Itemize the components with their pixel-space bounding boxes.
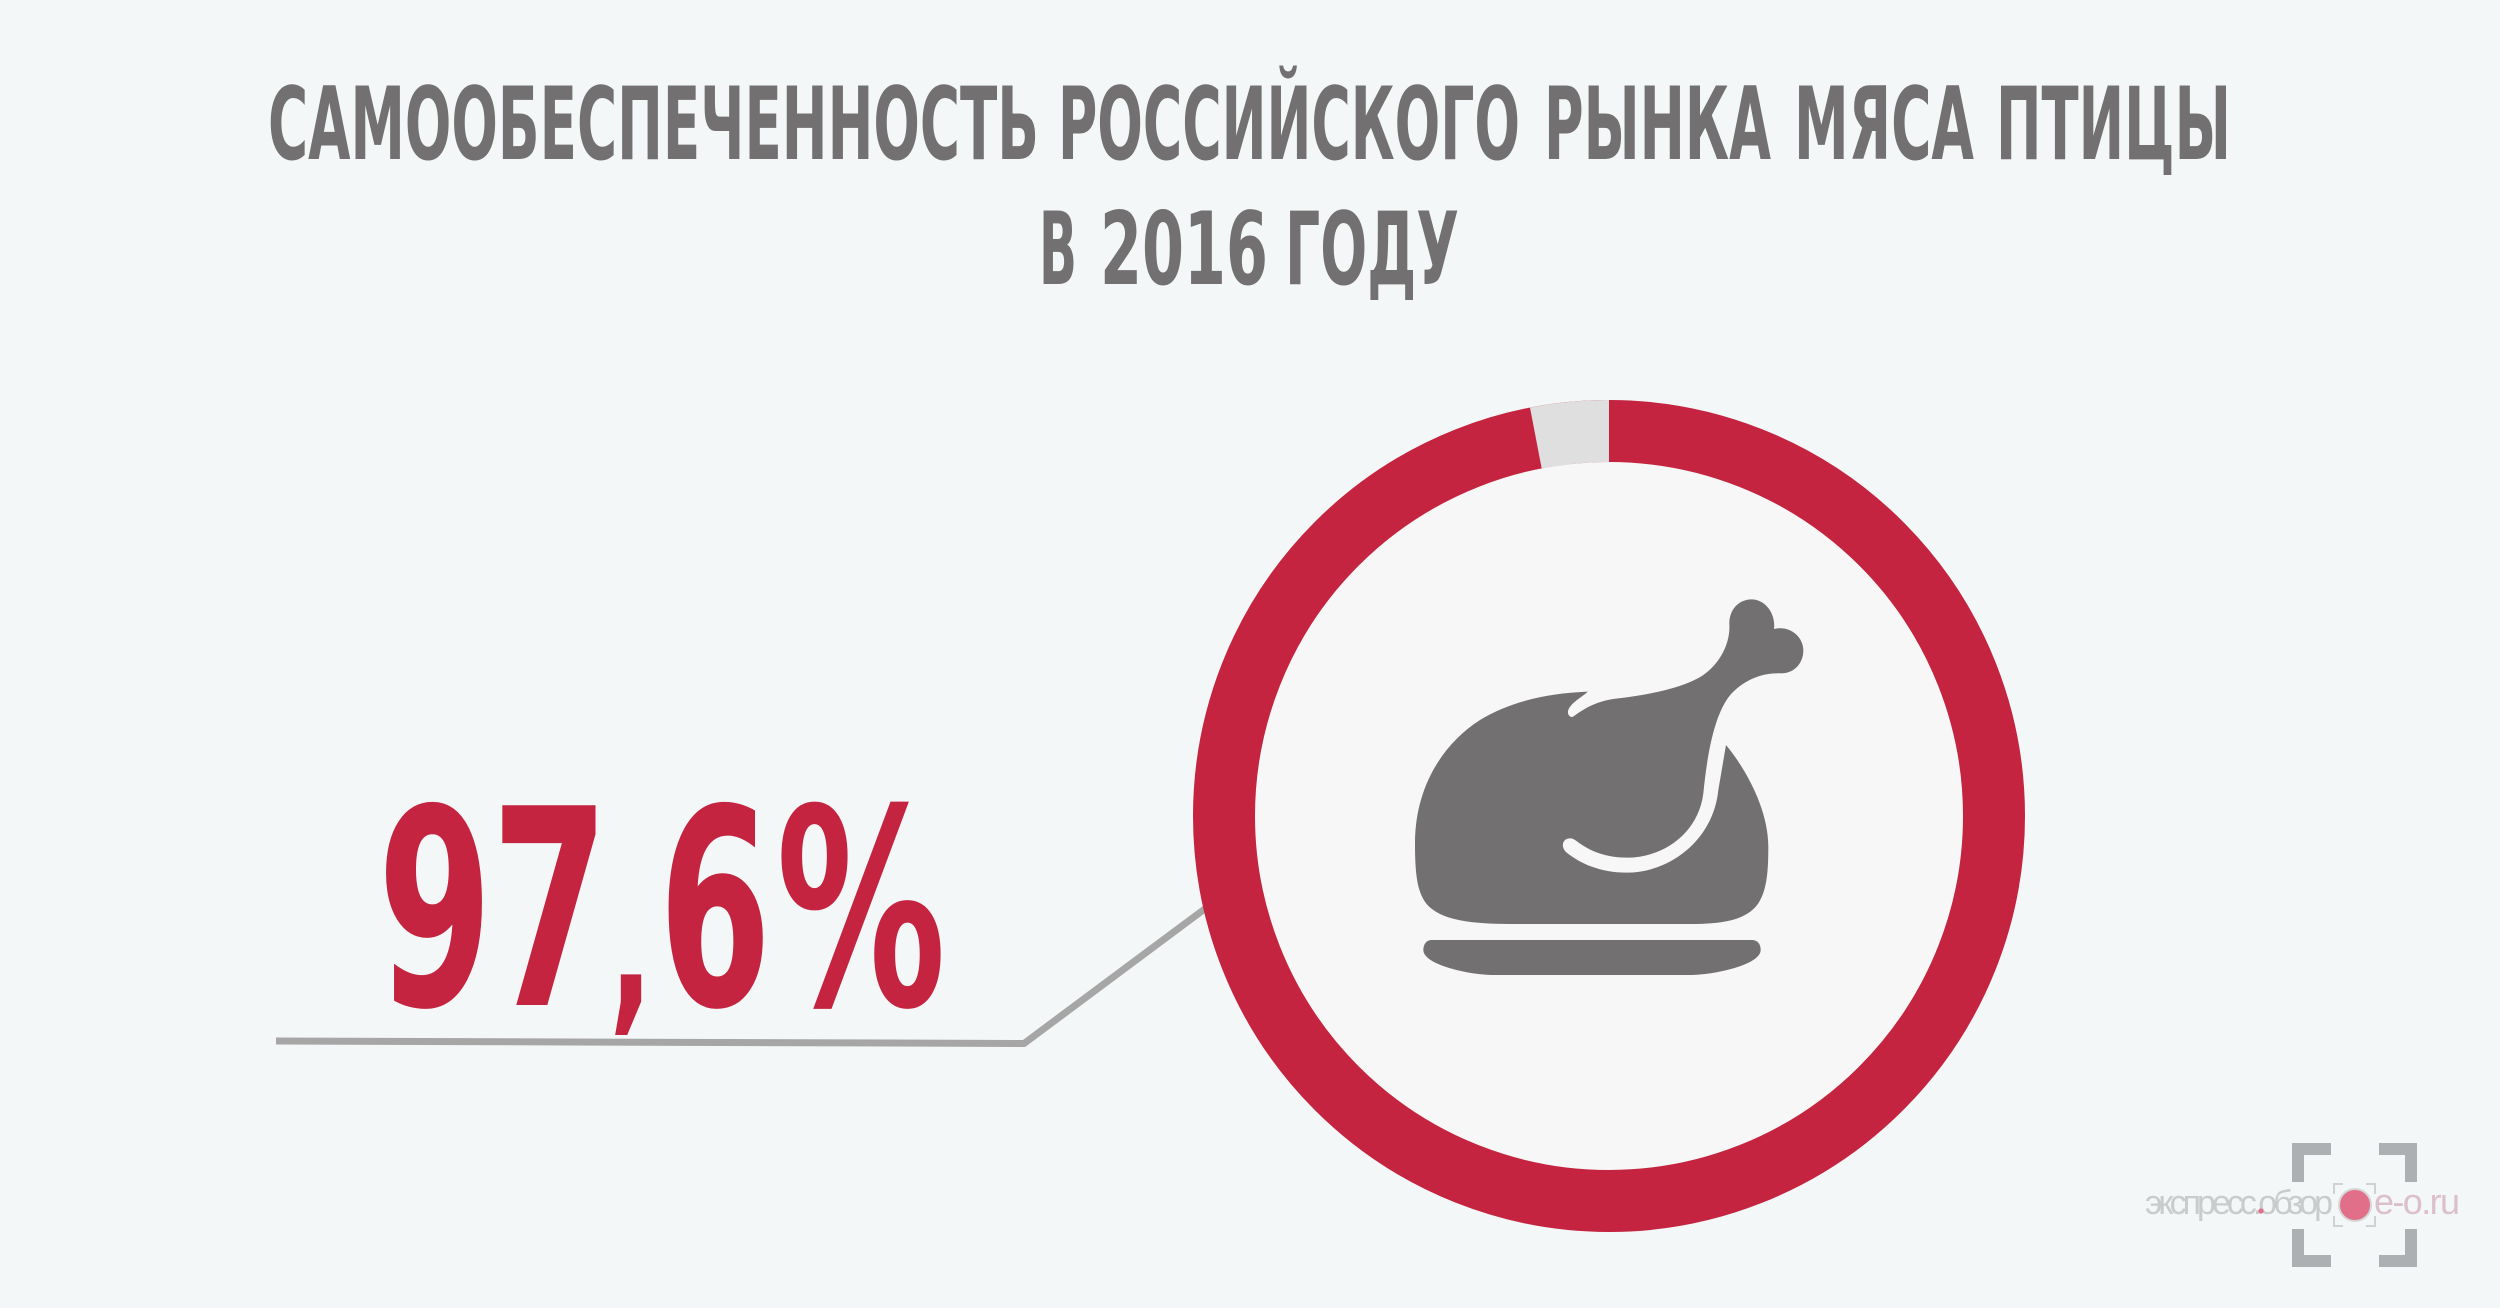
title	[268, 64, 2231, 308]
leader line	[276, 908, 1206, 1044]
value: 97,6%: 6	[658, 751, 772, 1070]
donut chart	[1224, 400, 1994, 1201]
logo red dot	[2339, 1189, 2371, 1221]
icon: roast chicken	[1415, 599, 1803, 975]
title: САМООБЕСПЕЧЕННОСТЬ	[268, 65, 1039, 183]
logo small brackets	[2334, 1184, 2375, 1226]
title: В	[1039, 190, 1077, 308]
title: РЫНКА	[1544, 65, 1771, 183]
value: 97,6%: 9	[378, 751, 492, 1070]
value: 97,6%: ,	[609, 840, 653, 1053]
logo text: экспресс.обзор	[2145, 1184, 2333, 1222]
value: 97,6%	[378, 751, 946, 1070]
logo domain: e-o.ru	[2374, 1181, 2460, 1222]
title: ПТИЦЫ	[1996, 65, 2231, 183]
title: РОССИЙСКОГО	[1058, 64, 1520, 183]
value: 97,6%: 7	[491, 751, 609, 1070]
grey segment	[1530, 400, 1609, 468]
title: ГОДУ	[1285, 190, 1459, 308]
logo viewfinder brackets	[2298, 1149, 2411, 1261]
logo: экспресс-обзор	[2145, 1149, 2460, 1261]
value: 97,6%: %	[776, 751, 946, 1070]
logo text dot	[2258, 1208, 2264, 1214]
title: МЯСА	[1794, 65, 1974, 183]
title: 2016	[1100, 190, 1268, 308]
